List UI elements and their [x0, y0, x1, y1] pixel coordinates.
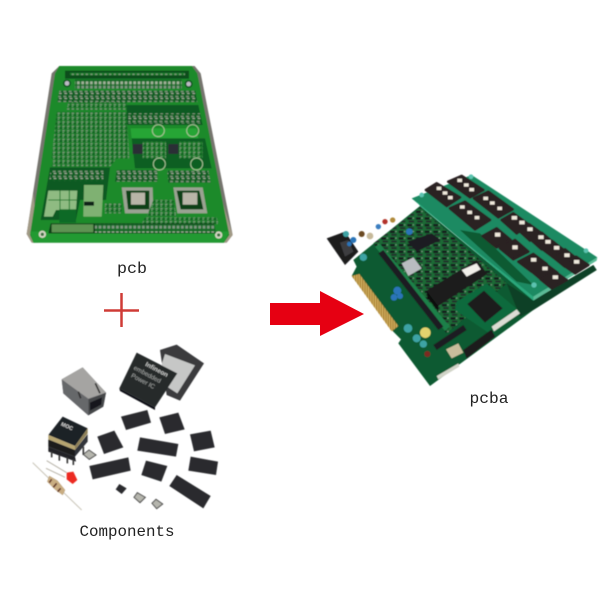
pad rows	[75, 79, 182, 89]
capacitors	[343, 217, 431, 357]
upper memory board	[412, 174, 597, 301]
mounting holes	[63, 79, 71, 87]
rear bracket	[327, 232, 358, 265]
main board	[352, 206, 597, 386]
large qfp chip	[455, 283, 520, 335]
gold edge fingers	[352, 274, 398, 331]
light connector blocks	[402, 257, 422, 276]
chip left	[122, 187, 153, 213]
analog section left	[52, 112, 129, 158]
memory chips	[426, 176, 588, 288]
icon: ethernet jack	[62, 367, 106, 415]
bottom connector	[142, 217, 219, 224]
light pads block	[44, 191, 77, 217]
white connector	[492, 309, 520, 331]
icon: infineon chip: Power IC	[130, 372, 156, 391]
power section right	[127, 105, 203, 125]
green board face	[30, 66, 229, 243]
board right dark underside	[507, 265, 597, 317]
icon: infineon chip: Infineon	[144, 361, 169, 379]
board outline with grey edges	[27, 66, 233, 243]
large black hybrid module	[427, 260, 487, 306]
top connector row	[65, 71, 189, 79]
long connector strip	[375, 244, 450, 331]
icon: resistor	[33, 463, 82, 510]
standoffs	[419, 193, 424, 197]
mid pads	[105, 203, 122, 213]
label: Components: Components	[80, 523, 174, 541]
processor pads	[115, 170, 157, 182]
chip right	[173, 187, 207, 213]
icon: transformer	[48, 417, 88, 465]
chip labels	[437, 179, 579, 279]
panel: pcb board photo	[27, 66, 233, 243]
arrow: red arrow to pcba	[270, 291, 364, 336]
lower dark section	[41, 167, 110, 220]
icons: small qfn chips	[83, 450, 163, 509]
panel: assembled pcba photo	[327, 174, 597, 386]
black connector and crystal	[463, 329, 495, 358]
label: pcba: pcba	[470, 390, 509, 408]
panel: electronic components photo	[33, 345, 218, 510]
icon: red led	[46, 461, 77, 484]
icon: infineon chip: embedded	[132, 365, 162, 385]
icon: infineon chip	[119, 345, 204, 410]
icon: transformer: MOC	[60, 422, 74, 432]
icon: red plus	[104, 293, 139, 327]
icons: black ic chips	[89, 410, 218, 508]
label: pcb: pcb	[117, 260, 147, 278]
main board component field	[373, 207, 507, 333]
